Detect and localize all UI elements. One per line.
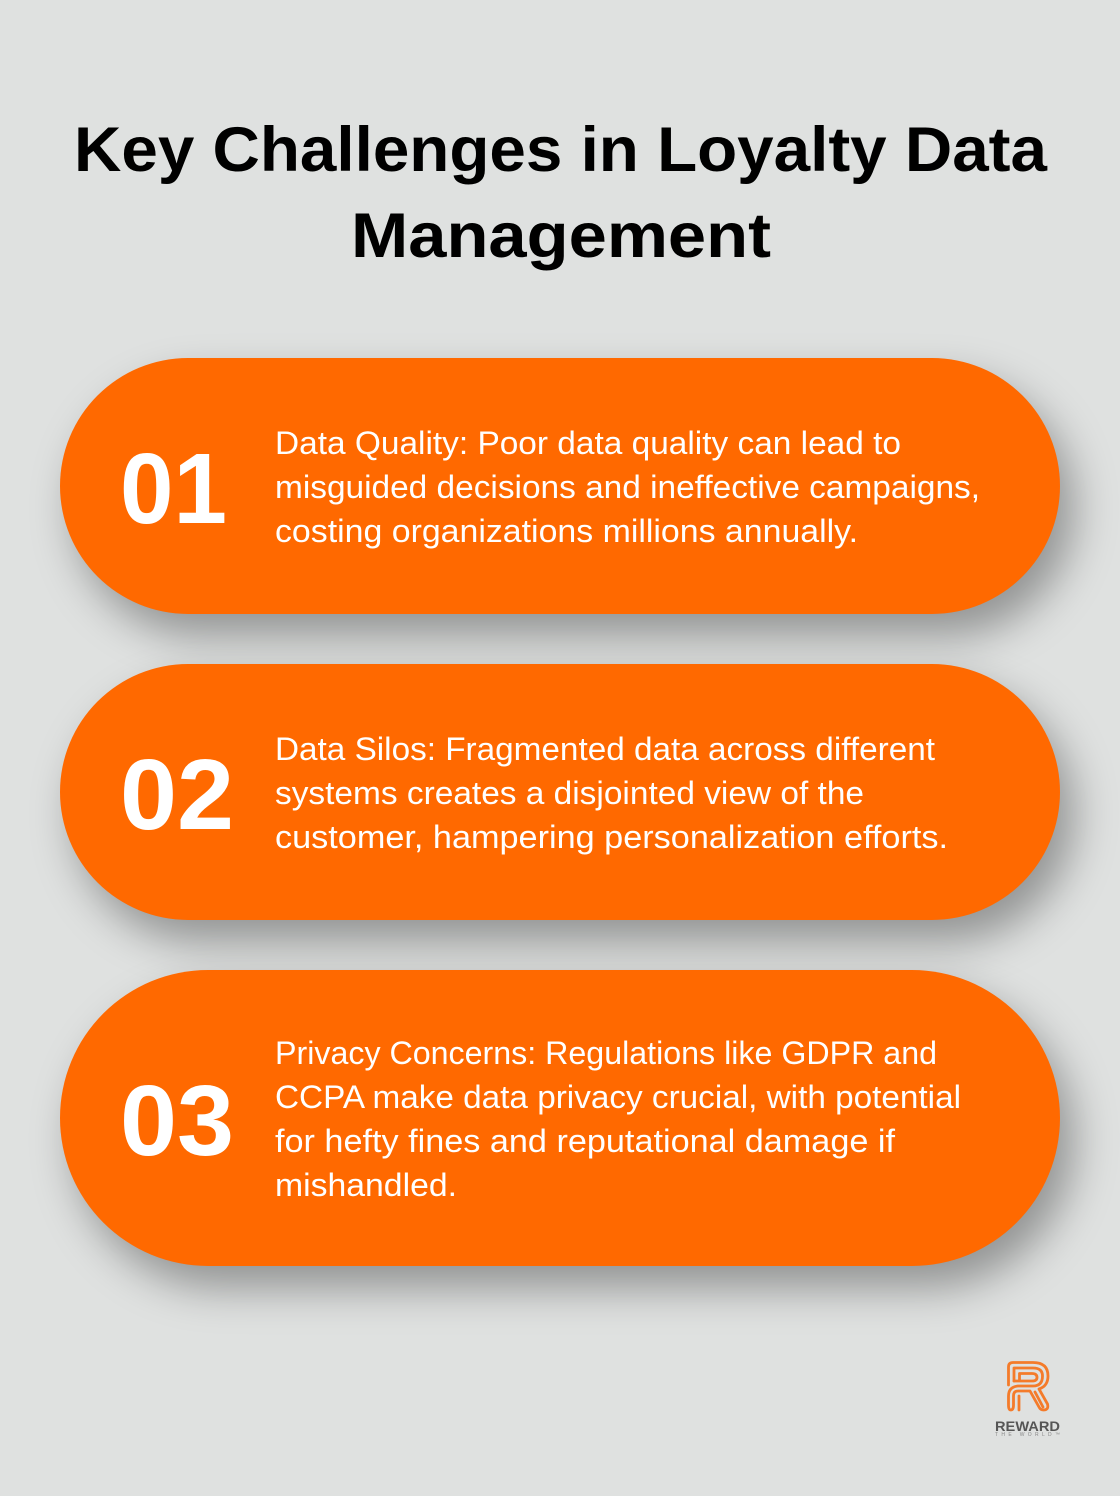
number 03: 03 [120, 1065, 234, 1177]
text: privacy concerns [275, 1035, 961, 1203]
icon: R mark [1008, 1362, 1048, 1410]
number 02: 02 [120, 739, 234, 851]
text: privacy concerns: for hefty fines and reputational damage if [275, 1123, 895, 1159]
panel background: privacy concerns [60, 970, 1060, 1266]
panel: data silos [60, 664, 1060, 920]
text: privacy concerns: CCPA make data privacy crucial, with potential [275, 1079, 961, 1115]
text: privacy concerns: mishandled. [275, 1167, 457, 1203]
panel: data quality [60, 358, 1060, 614]
title [74, 115, 1048, 271]
text: data silos [275, 731, 948, 855]
number 01: 01 [120, 433, 227, 545]
panel: privacy concerns [60, 970, 1060, 1266]
text: data silos: customer, hampering personalization efforts. [275, 819, 948, 855]
text: data quality: Data Quality: Poor data quality can lead to [275, 425, 901, 461]
logo wordmark: REWARD [995, 1418, 1060, 1434]
text: privacy concerns: Privacy Concerns: Regulations like GDPR and [275, 1035, 937, 1071]
logo: reward the world [995, 1362, 1060, 1438]
panel background: data quality [60, 358, 1060, 614]
text: data quality [275, 425, 980, 549]
panel background: data silos [60, 664, 1060, 920]
logo tagline: THE WORLD™ [995, 1432, 1060, 1438]
text: data quality: misguided decisions and ineffective campaigns, [275, 469, 980, 505]
text: data quality: costing organizations millions annually. [275, 513, 858, 549]
text: data silos: systems creates a disjointed view of the [275, 775, 864, 811]
title: Management [351, 201, 771, 271]
text: data silos: Data Silos: Fragmented data across different [275, 731, 935, 767]
title: Key Challenges in Loyalty Data [74, 115, 1048, 185]
